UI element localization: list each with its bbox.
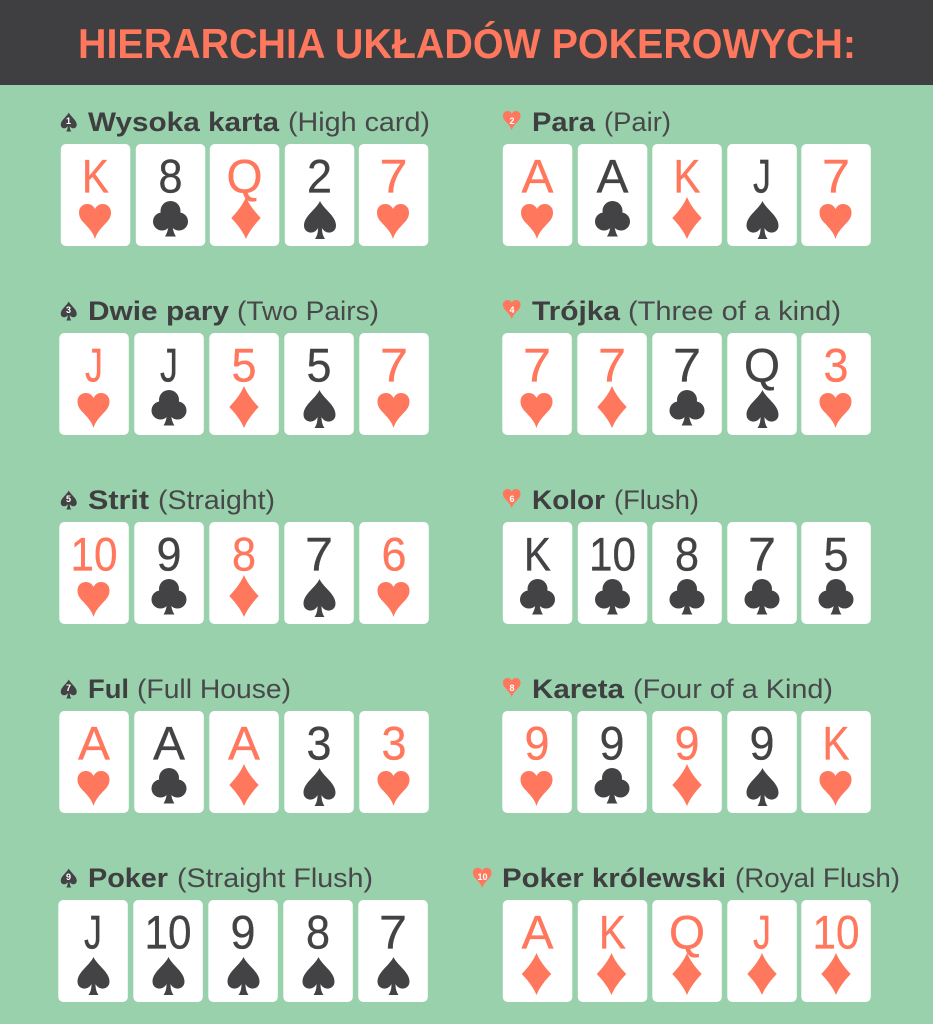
cards: pair <box>503 144 871 246</box>
panel: flush <box>503 485 871 624</box>
cards: three of a kind: 3 <box>824 338 848 392</box>
heading: straight flush: Poker <box>88 863 169 893</box>
cards: full house: A <box>228 716 261 770</box>
heading: flush: (Flush) <box>614 485 699 515</box>
cards: flush: 10 <box>589 528 636 580</box>
cards: straight <box>59 522 429 624</box>
heading: straight <box>61 485 275 515</box>
heading: pair: 2 <box>509 116 515 126</box>
cards: straight: 10 <box>70 528 118 580</box>
cards: straight: 7 <box>305 528 333 580</box>
cards: flush: 7 <box>748 528 776 580</box>
cards: high card: 8 <box>158 150 182 202</box>
cards: high card: 2 <box>307 150 332 202</box>
heading: royal flush <box>473 863 900 893</box>
heading: straight: 5 <box>66 494 71 504</box>
cards: straight flush: 8 <box>306 906 330 958</box>
heading: straight flush <box>61 863 373 893</box>
heading: flush <box>503 485 699 515</box>
heading: four of a kind: (Four of a Kind) <box>633 674 833 704</box>
cards: royal flush: J <box>753 906 771 958</box>
heading: three of a kind: Trójka <box>532 296 621 326</box>
panel: straight flush <box>58 863 428 1002</box>
heading: flush: Kolor <box>532 485 606 515</box>
cards: four of a kind: 9 <box>524 716 550 770</box>
cards: three of a kind <box>502 333 871 435</box>
cards: straight flush <box>58 900 428 1002</box>
heading: full house <box>61 674 291 704</box>
heading: two pairs: 3 <box>66 305 71 315</box>
cards: royal flush: K <box>599 906 626 958</box>
heading: flush: 6 <box>509 494 515 504</box>
cards: full house: 3 <box>306 716 332 770</box>
cards: four of a kind: K <box>822 716 850 770</box>
cards: flush <box>503 522 871 624</box>
panel: high card <box>61 107 430 246</box>
cards: pair: K <box>674 150 700 202</box>
cards: high card: Q <box>226 150 262 202</box>
cards: royal flush <box>503 900 871 1002</box>
cards: straight flush: 9 <box>230 906 256 958</box>
cards: four of a kind <box>502 711 871 813</box>
cards: pair: 7 <box>822 150 850 202</box>
heading: full house: 7 <box>66 683 71 693</box>
heading: high card: (High card) <box>288 107 430 137</box>
panel: pair <box>503 107 871 246</box>
heading: high card <box>61 107 430 137</box>
cards: two pairs: 7 <box>380 338 408 392</box>
heading: two pairs <box>61 296 379 326</box>
heading: three of a kind: (Three of a kind) <box>628 296 841 326</box>
cards: two pairs: 5 <box>232 338 256 392</box>
cards: straight: 9 <box>156 528 182 580</box>
heading: straight: (Straight) <box>158 485 275 515</box>
heading: three of a kind <box>503 296 841 326</box>
panel: royal flush <box>473 863 900 1002</box>
cards: three of a kind: 7 <box>598 338 626 392</box>
heading: three of a kind: 4 <box>509 305 515 315</box>
heading: full house: (Full House) <box>137 674 291 704</box>
cards: straight: 6 <box>382 528 406 580</box>
heading: royal flush: Poker królewski <box>502 863 726 893</box>
panel: three of a kind <box>502 296 871 435</box>
cards: pair: A <box>596 150 629 202</box>
cards: full house <box>59 711 429 813</box>
cards: two pairs <box>59 333 429 435</box>
heading: royal flush: (Royal Flush) <box>735 863 900 893</box>
cards: three of a kind: 7 <box>673 338 701 392</box>
cards: pair: A <box>522 150 554 202</box>
heading: straight flush: (Straight Flush) <box>177 863 373 893</box>
cards: straight flush: 10 <box>144 906 192 958</box>
cards: full house: 3 <box>382 716 406 770</box>
cards: three of a kind: Q <box>744 338 780 392</box>
heading: straight flush: 9 <box>66 872 71 882</box>
cards: high card: K <box>82 150 109 202</box>
cards: flush: 8 <box>675 528 699 580</box>
cards: royal flush: 10 <box>812 906 860 958</box>
cards: royal flush: Q <box>669 906 705 958</box>
cards: four of a kind: 9 <box>674 716 700 770</box>
heading: pair <box>503 107 671 137</box>
heading: pair: (Pair) <box>604 107 671 137</box>
cards: three of a kind: 7 <box>523 338 551 392</box>
cards: straight: 8 <box>232 528 256 580</box>
cards: flush: 5 <box>824 528 848 580</box>
cards: pair: J <box>753 150 771 202</box>
heading: straight: Strit <box>88 485 149 515</box>
cards: high card: 7 <box>380 150 408 202</box>
cards: royal flush: A <box>522 906 554 958</box>
title: HIERARCHIA UKŁADÓW POKEROWYCH: <box>78 19 856 67</box>
cards: full house: A <box>78 716 111 770</box>
cards: two pairs: 5 <box>306 338 332 392</box>
heading: high card: Wysoka karta <box>88 107 280 137</box>
heading: two pairs: Dwie pary <box>88 296 229 326</box>
cards: two pairs: J <box>160 338 178 392</box>
cards: high card <box>61 144 428 246</box>
cards: straight flush: J <box>84 906 102 958</box>
title <box>0 0 933 85</box>
cards: full house: A <box>153 716 186 770</box>
panel: straight <box>59 485 429 624</box>
heading: four of a kind <box>503 674 833 704</box>
heading: royal flush: 10 <box>477 872 488 882</box>
heading: pair: Para <box>532 107 596 137</box>
heading: full house: Ful <box>88 674 129 704</box>
panel: two pairs <box>59 296 429 435</box>
cards: flush: K <box>524 528 551 580</box>
cards: two pairs: J <box>85 338 103 392</box>
heading: four of a kind: Kareta <box>532 674 625 704</box>
cards: straight flush: 7 <box>379 906 407 958</box>
panel: four of a kind <box>502 674 871 813</box>
cards: four of a kind: 9 <box>750 716 774 770</box>
cards: four of a kind: 9 <box>600 716 624 770</box>
heading: high card: 1 <box>66 116 71 126</box>
panel: full house <box>59 674 429 813</box>
heading: four of a kind: 8 <box>509 683 515 693</box>
heading: two pairs: (Two Pairs) <box>237 296 379 326</box>
